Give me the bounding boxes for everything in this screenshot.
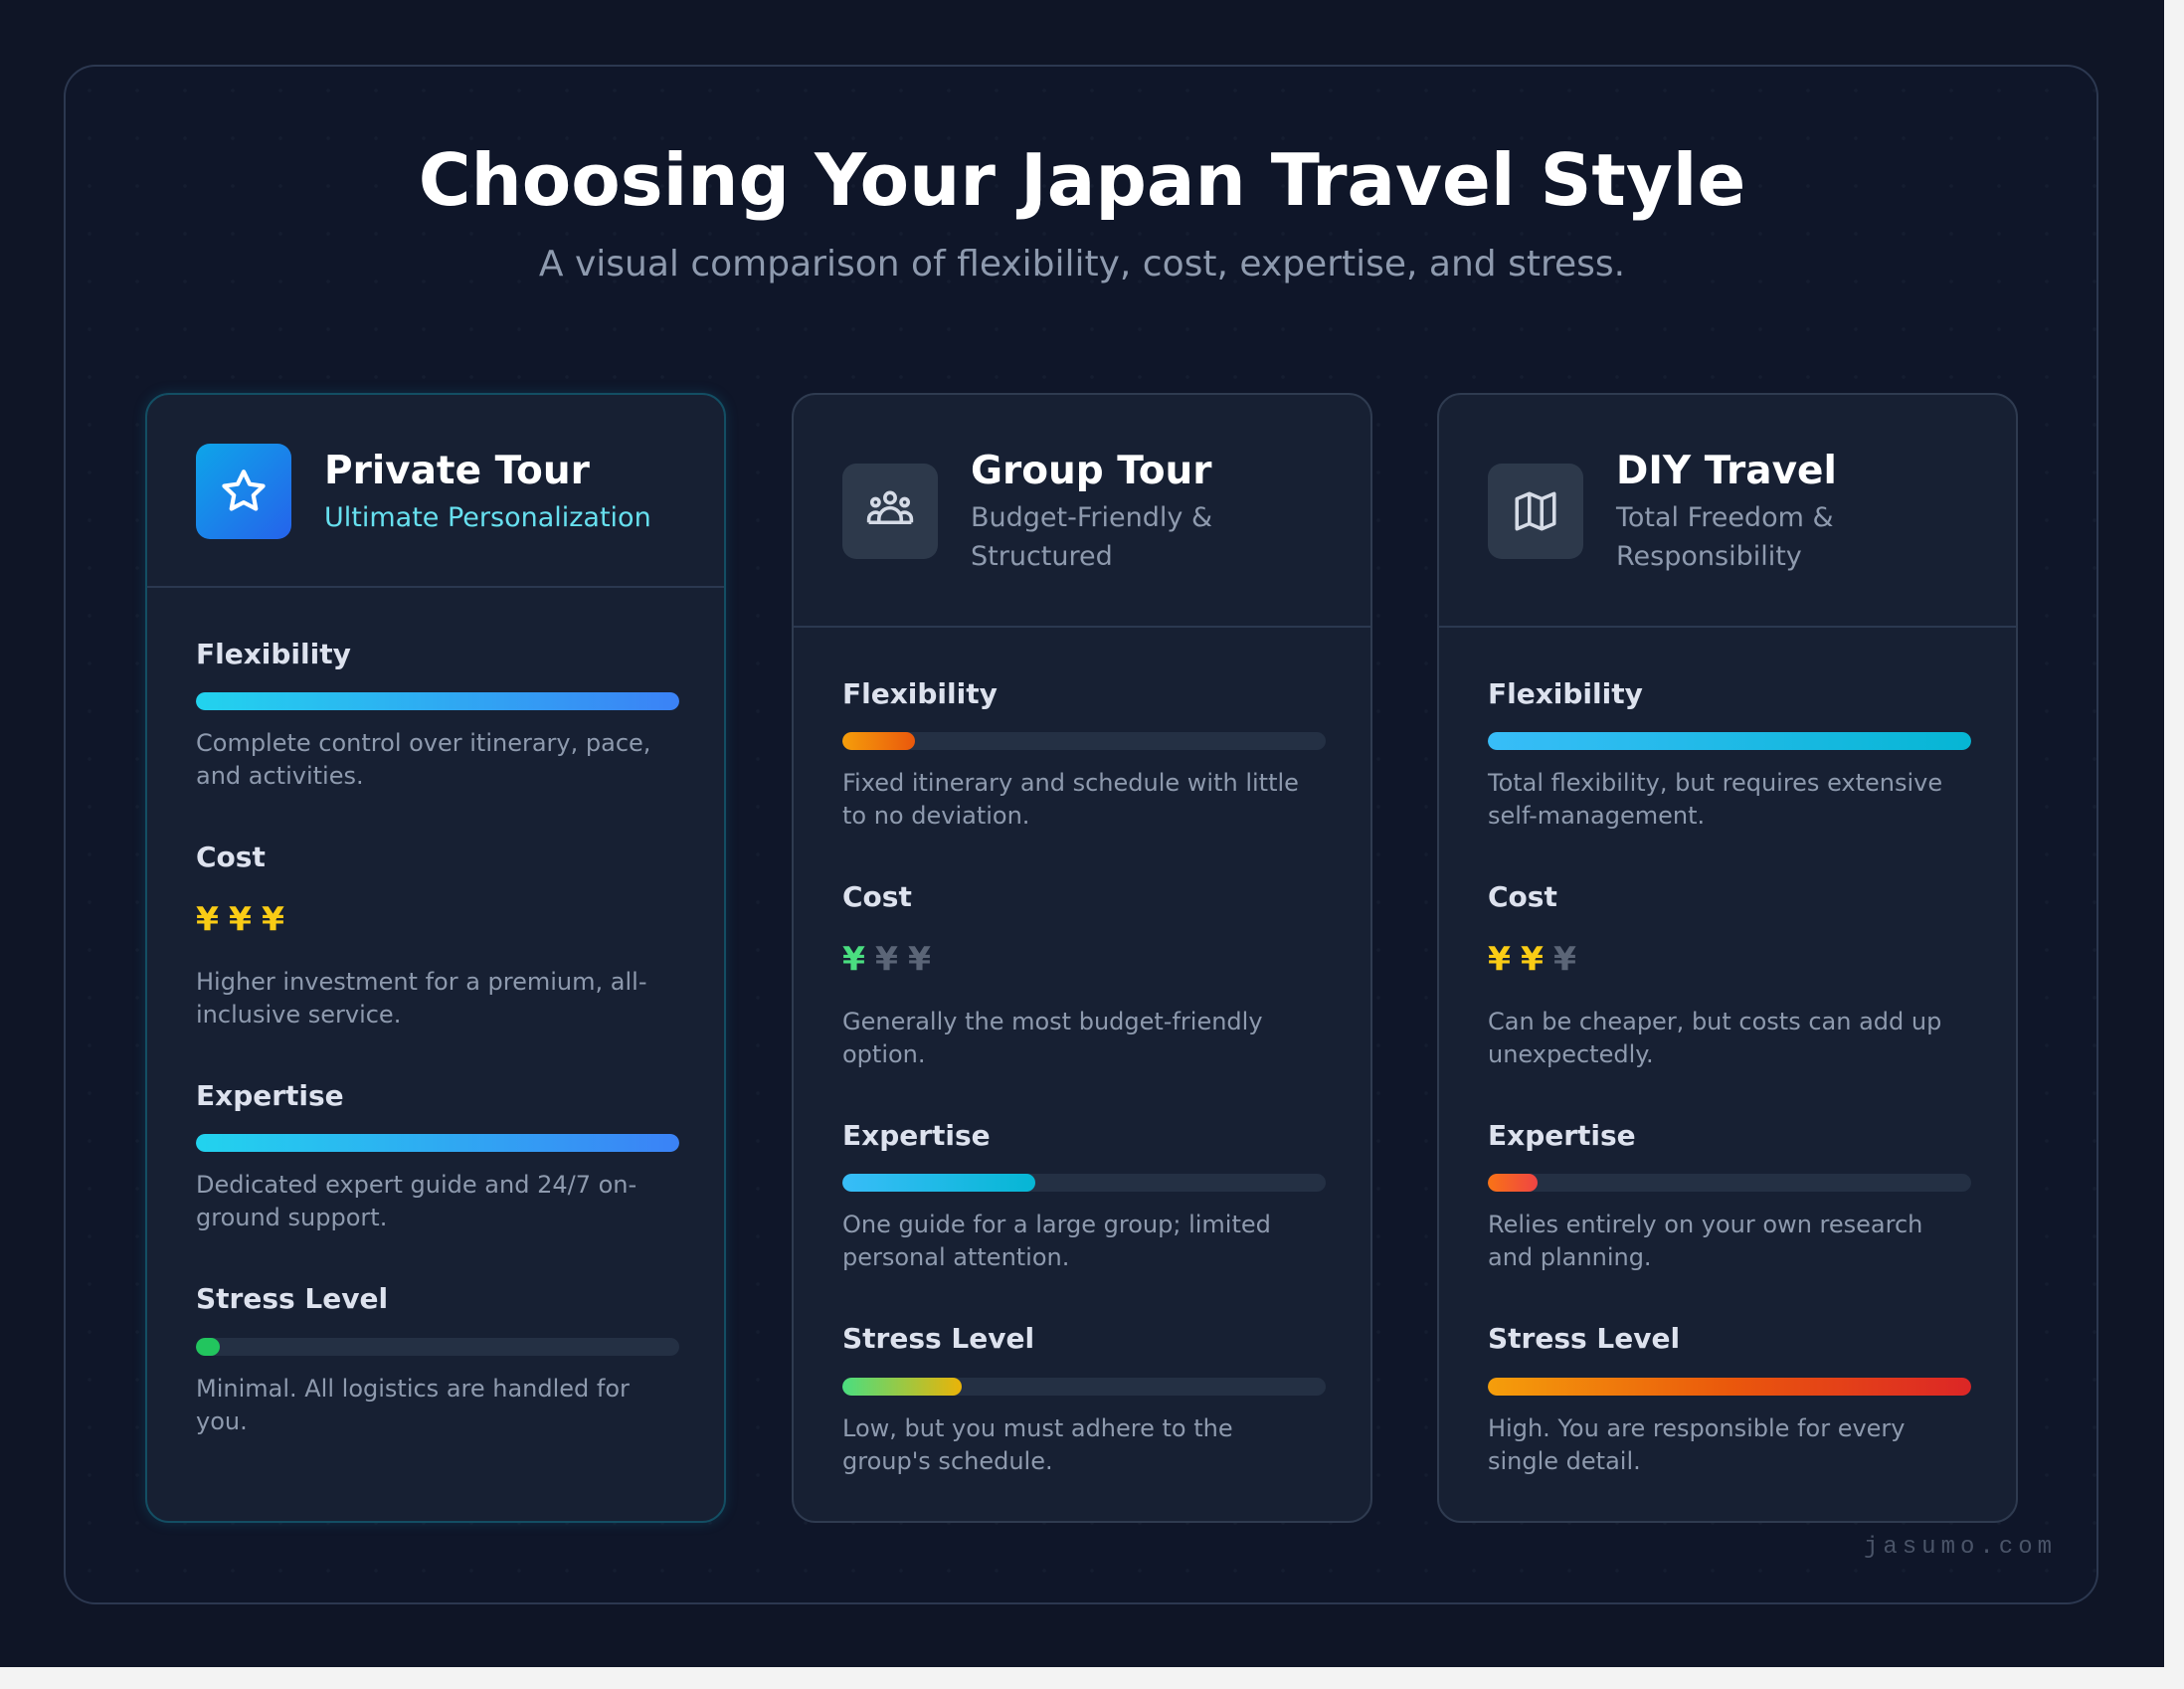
heading: private tour: Private Tour — [324, 449, 590, 493]
panel: group tour: Expertise — [842, 1119, 991, 1152]
section: cost — [1488, 880, 1941, 1068]
panel: private tour: Complete control over itinerary, pace, and activities. — [196, 729, 650, 790]
panel: private tour: Cost — [196, 841, 266, 873]
section: flexibility — [196, 638, 679, 790]
section: stress — [196, 1282, 679, 1435]
subheading — [1615, 502, 1834, 572]
panel: diy travel: High. You are responsible for every single detail. — [1488, 1414, 1906, 1475]
section: cost — [196, 841, 646, 1029]
section: stress — [842, 1322, 1326, 1475]
panel: group tour: ¥¥¥ — [842, 939, 941, 978]
subheading: Ultimate Personalization — [324, 502, 651, 533]
panel: group tour: Flexibility — [842, 677, 998, 710]
subheading: Budget-Friendly & — [971, 502, 1212, 533]
panel: private tour: Expertise — [196, 1079, 344, 1112]
panel: private tour: Dedicated expert guide and 24/7 on-ground support. — [196, 1171, 637, 1231]
panel: diy travel: Flexibility — [1488, 677, 1643, 710]
panel: group tour: One guide for a large group; limited personal attention. — [842, 1211, 1271, 1271]
panel: group tour: Stress Level — [842, 1322, 1034, 1355]
heading: diy travel: DIY Travel — [1616, 449, 1837, 493]
panel: diy travel: Expertise — [1488, 1119, 1636, 1152]
panel: diy travel: Can be cheaper, but costs can add up unexpectedly. — [1488, 1008, 1941, 1068]
title: Choosing Your Japan Travel Style — [419, 138, 1745, 222]
subheading — [971, 502, 1212, 572]
section: expertise — [196, 1079, 679, 1231]
heading: group tour: Group Tour — [971, 449, 1212, 493]
panel: group tour: Low, but you must adhere to the group's schedule. — [842, 1414, 1233, 1475]
panel: group tour: Cost — [842, 880, 912, 913]
section: flexibility — [842, 677, 1326, 830]
panel: private tour: Stress Level — [196, 1282, 388, 1315]
panel: private tour: Minimal. All logistics are handled for you. — [196, 1375, 630, 1435]
panel: private tour: ¥¥¥ — [196, 899, 294, 938]
panel: group tour — [792, 393, 1372, 1523]
section: cost — [842, 880, 1263, 1068]
panel: private tour: Higher investment for a premium, all-inclusive service. — [196, 968, 646, 1029]
icon: map — [1488, 464, 1583, 559]
panel: diy travel: Total flexibility, but requires extensive self-management. — [1488, 769, 1942, 830]
panel: private tour: Flexibility — [196, 638, 351, 670]
section: expertise — [1488, 1119, 1971, 1271]
watermark: jasumo.com — [1864, 1534, 2057, 1561]
panel: diy travel: Cost — [1488, 880, 1557, 913]
icon: people — [842, 464, 938, 559]
subheading: Responsibility — [1616, 541, 1802, 572]
section: stress — [1488, 1322, 1971, 1475]
panel: diy travel: Relies entirely on your own research and planning. — [1488, 1211, 1922, 1271]
panel: diy travel — [1437, 393, 2018, 1523]
panel: diy travel: Stress Level — [1488, 1322, 1680, 1355]
subheading: Total Freedom & — [1616, 502, 1834, 533]
subheading: Structured — [971, 541, 1113, 572]
panel: group tour: Fixed itinerary and schedule with little to no deviation. — [842, 769, 1299, 830]
panel: diy travel: ¥¥¥ — [1488, 939, 1586, 978]
section: flexibility — [1488, 677, 1971, 830]
subtitle: A visual comparison of flexibility, cost, expertise, and stress. — [539, 244, 1625, 284]
icon: star — [196, 444, 291, 539]
panel: private tour — [145, 393, 726, 1523]
panel: group tour: Generally the most budget-friendly option. — [842, 1008, 1263, 1068]
section: expertise — [842, 1119, 1326, 1271]
